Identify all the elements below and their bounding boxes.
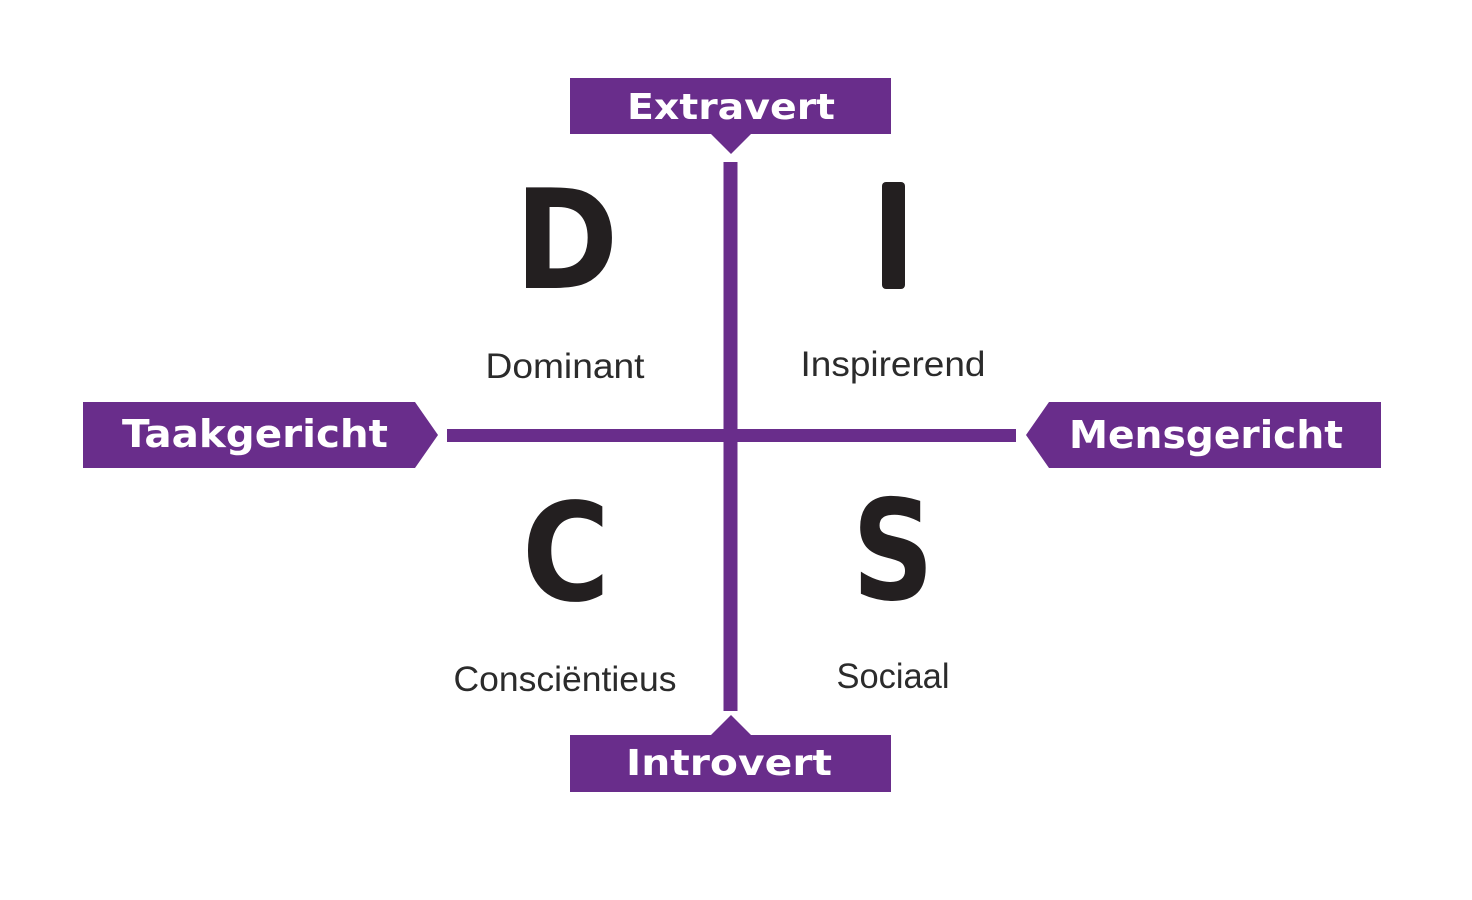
banner: Taakgericht: Taakgericht (122, 412, 388, 456)
banner: Extravert (570, 78, 891, 154)
label: Sociaal: Sociaal (836, 657, 950, 696)
banner: Taakgericht (83, 402, 438, 468)
label: Consciëntieus: Consciëntieus (454, 660, 676, 699)
banner: Introvert (570, 715, 891, 792)
label: Dominant: Dominant (486, 347, 645, 386)
label: Inspirerend: Inspirerend (800, 345, 986, 384)
banner: Mensgericht (1026, 402, 1381, 468)
letter C: C (522, 475, 610, 633)
letter S: S (852, 470, 934, 632)
banner: Mensgericht: Mensgericht (1069, 413, 1343, 457)
banner: Introvert: Introvert (626, 743, 832, 784)
letter I (882, 182, 905, 289)
vertical axis (724, 162, 738, 711)
letter D: D (514, 160, 618, 321)
horizontal axis (447, 429, 1016, 442)
banner: Extravert: Extravert (627, 87, 835, 128)
